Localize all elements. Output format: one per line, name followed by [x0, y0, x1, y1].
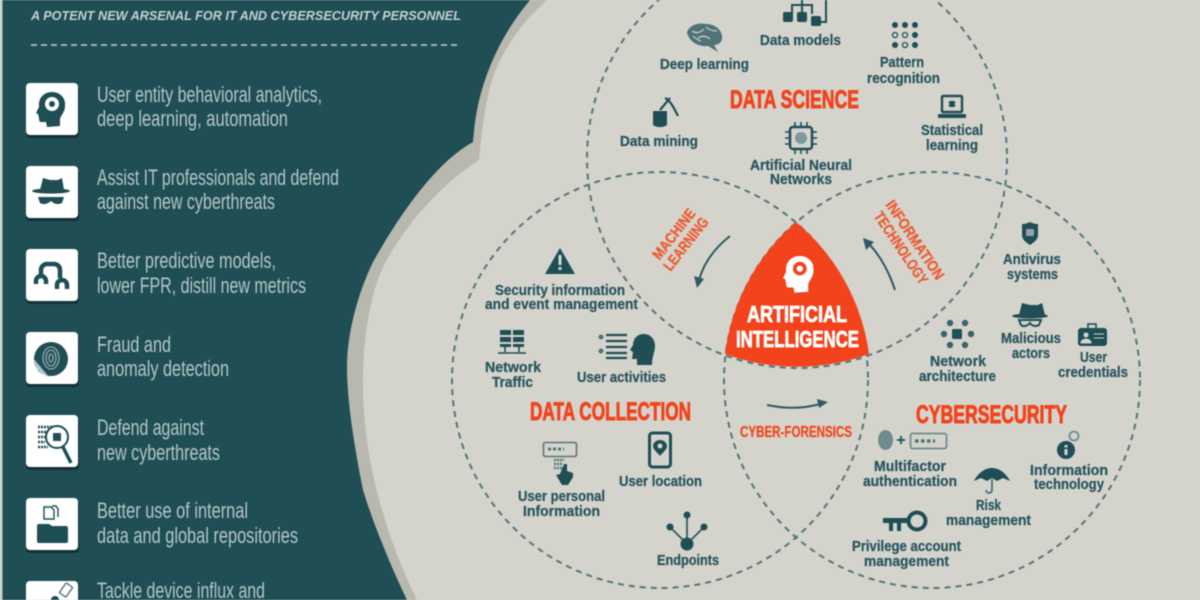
icon: deep learning [660, 23, 749, 73]
icon: network architecture [919, 320, 996, 385]
icon: data mining [620, 98, 698, 150]
label: information technology with arrow [863, 197, 947, 290]
icon: risk umbrella: management [946, 512, 1031, 529]
icon: endpoints: Endpoints [657, 552, 719, 569]
icon: privilege key: management [864, 553, 949, 570]
icon: user credentials: credentials [1058, 364, 1128, 381]
item: predictive models [26, 248, 306, 304]
icon: neural chip: Networks [770, 171, 832, 188]
item: assist IT: against new cyberthreats [97, 189, 275, 214]
label: cyber-forensics with arrow: CYBER-FORENSICS [740, 424, 852, 441]
icon: malicious actors: actors [1012, 345, 1050, 362]
icon: neural chip: Artificial Neural [750, 157, 852, 174]
label: machine learning with arrow: MACHINE [649, 205, 700, 263]
icon: user personal information: Information [523, 503, 600, 520]
icon: network architecture: architecture [919, 368, 996, 385]
icon: pattern recognition [867, 22, 940, 87]
item: predictive models: Better predictive models, [97, 248, 276, 273]
icon: warning: and event management [485, 296, 638, 313]
icon: data models [760, 0, 841, 49]
icon: endpoints [657, 512, 719, 569]
item: fraud detection [26, 332, 229, 387]
item: fraud detection: Fraud and [97, 332, 171, 357]
icon: privilege key: Privilege account [852, 538, 961, 555]
item: assist IT: Assist IT professionals and defend [97, 165, 339, 190]
icon: user activities: User activities [577, 369, 666, 386]
item: data repositories: Better use of internal [97, 498, 248, 523]
icon: statistical learning: Statistical [921, 122, 983, 139]
item: defend: new cyberthreats [97, 440, 220, 465]
icon: pattern recognition: recognition [867, 70, 940, 87]
panel: artificial intelligence centre: INTELLIGENCE [736, 326, 859, 352]
item: analytics: User entity behavioral analytics, [97, 82, 322, 107]
icon: risk umbrella: Risk [976, 497, 1002, 514]
icon: multifactor authentication: Multifactor [874, 458, 946, 475]
icon: multifactor authentication: authentication [863, 473, 957, 490]
item: data repositories: data and global repositories [97, 523, 298, 548]
item: defend: Defend against [97, 415, 204, 440]
item: analytics [26, 82, 322, 138]
icon: warning [485, 248, 638, 313]
item: predictive models: lower FPR, distill new metrics [97, 273, 306, 298]
item: defend [26, 415, 220, 470]
icon: user personal information [518, 442, 605, 520]
icon: network traffic: Network [485, 359, 542, 376]
icon: privilege key [852, 512, 961, 570]
label: machine learning with arrow: LEARNING [660, 214, 712, 274]
panel: cybersecurity: CYBERSECURITY [916, 401, 1067, 429]
icon: information technology [1030, 432, 1108, 493]
label: machine learning with arrow [649, 205, 730, 288]
panel: artificial intelligence centre [725, 222, 869, 367]
panel: cybersecurity [852, 222, 1128, 570]
panel: data science [620, 0, 983, 188]
icon: warning: Security information [495, 282, 625, 299]
venn diagram circles [452, 0, 1140, 588]
icon: statistical learning [921, 96, 983, 154]
item: device influx [26, 578, 265, 600]
icon: user personal information: User personal [518, 488, 605, 505]
label: cyber-forensics with arrow [740, 399, 852, 441]
panel: data science: DATA SCIENCE [730, 86, 859, 114]
item: analytics: deep learning, automation [97, 106, 288, 131]
icon: pattern recognition: Pattern [880, 54, 924, 71]
icon: information technology: Information [1030, 462, 1108, 479]
icon: user credentials [1058, 324, 1128, 381]
subtitle: A POTENT NEW ARSENAL FOR IT AND CYBERSECURITY PERSONNEL [30, 8, 461, 23]
item: fraud detection: anomaly detection [97, 356, 229, 381]
icon: network architecture: Network [930, 353, 987, 370]
icon: network traffic: Traffic [492, 374, 533, 391]
icon: statistical learning: learning [926, 137, 978, 154]
icon: data mining: Data mining [620, 133, 698, 150]
panel: data collection: DATA COLLECTION [530, 398, 691, 426]
icon: user credentials: User [1080, 349, 1107, 366]
item: assist IT [26, 165, 339, 221]
item: data repositories [26, 498, 298, 553]
icon: multifactor authentication [863, 430, 957, 490]
icon: user location [619, 433, 702, 490]
icon: user location: User location [619, 473, 702, 490]
icon: malicious actors: Malicious [1001, 330, 1061, 347]
icon: neural chip [750, 122, 852, 188]
icon: data models: Data models [760, 32, 841, 49]
left teal panel [0, 0, 530, 600]
icon: risk umbrella [946, 468, 1031, 529]
icon: antivirus shield [1003, 222, 1061, 283]
panel: data collection [485, 248, 719, 569]
icon: antivirus shield: Antivirus [1003, 251, 1061, 268]
label: information technology with arrow: TECHNOLOGY [870, 209, 931, 288]
icon: user activities [577, 334, 666, 386]
icon: network traffic [485, 330, 542, 391]
icon: information technology: technology [1034, 476, 1105, 493]
icon: antivirus shield: systems [1007, 266, 1058, 283]
label: information technology with arrow: INFORMATION [882, 197, 947, 283]
panel: artificial intelligence centre: ARTIFICIAL [747, 301, 847, 327]
icon: malicious actors [1001, 303, 1061, 362]
icon: deep learning: Deep learning [660, 56, 749, 73]
